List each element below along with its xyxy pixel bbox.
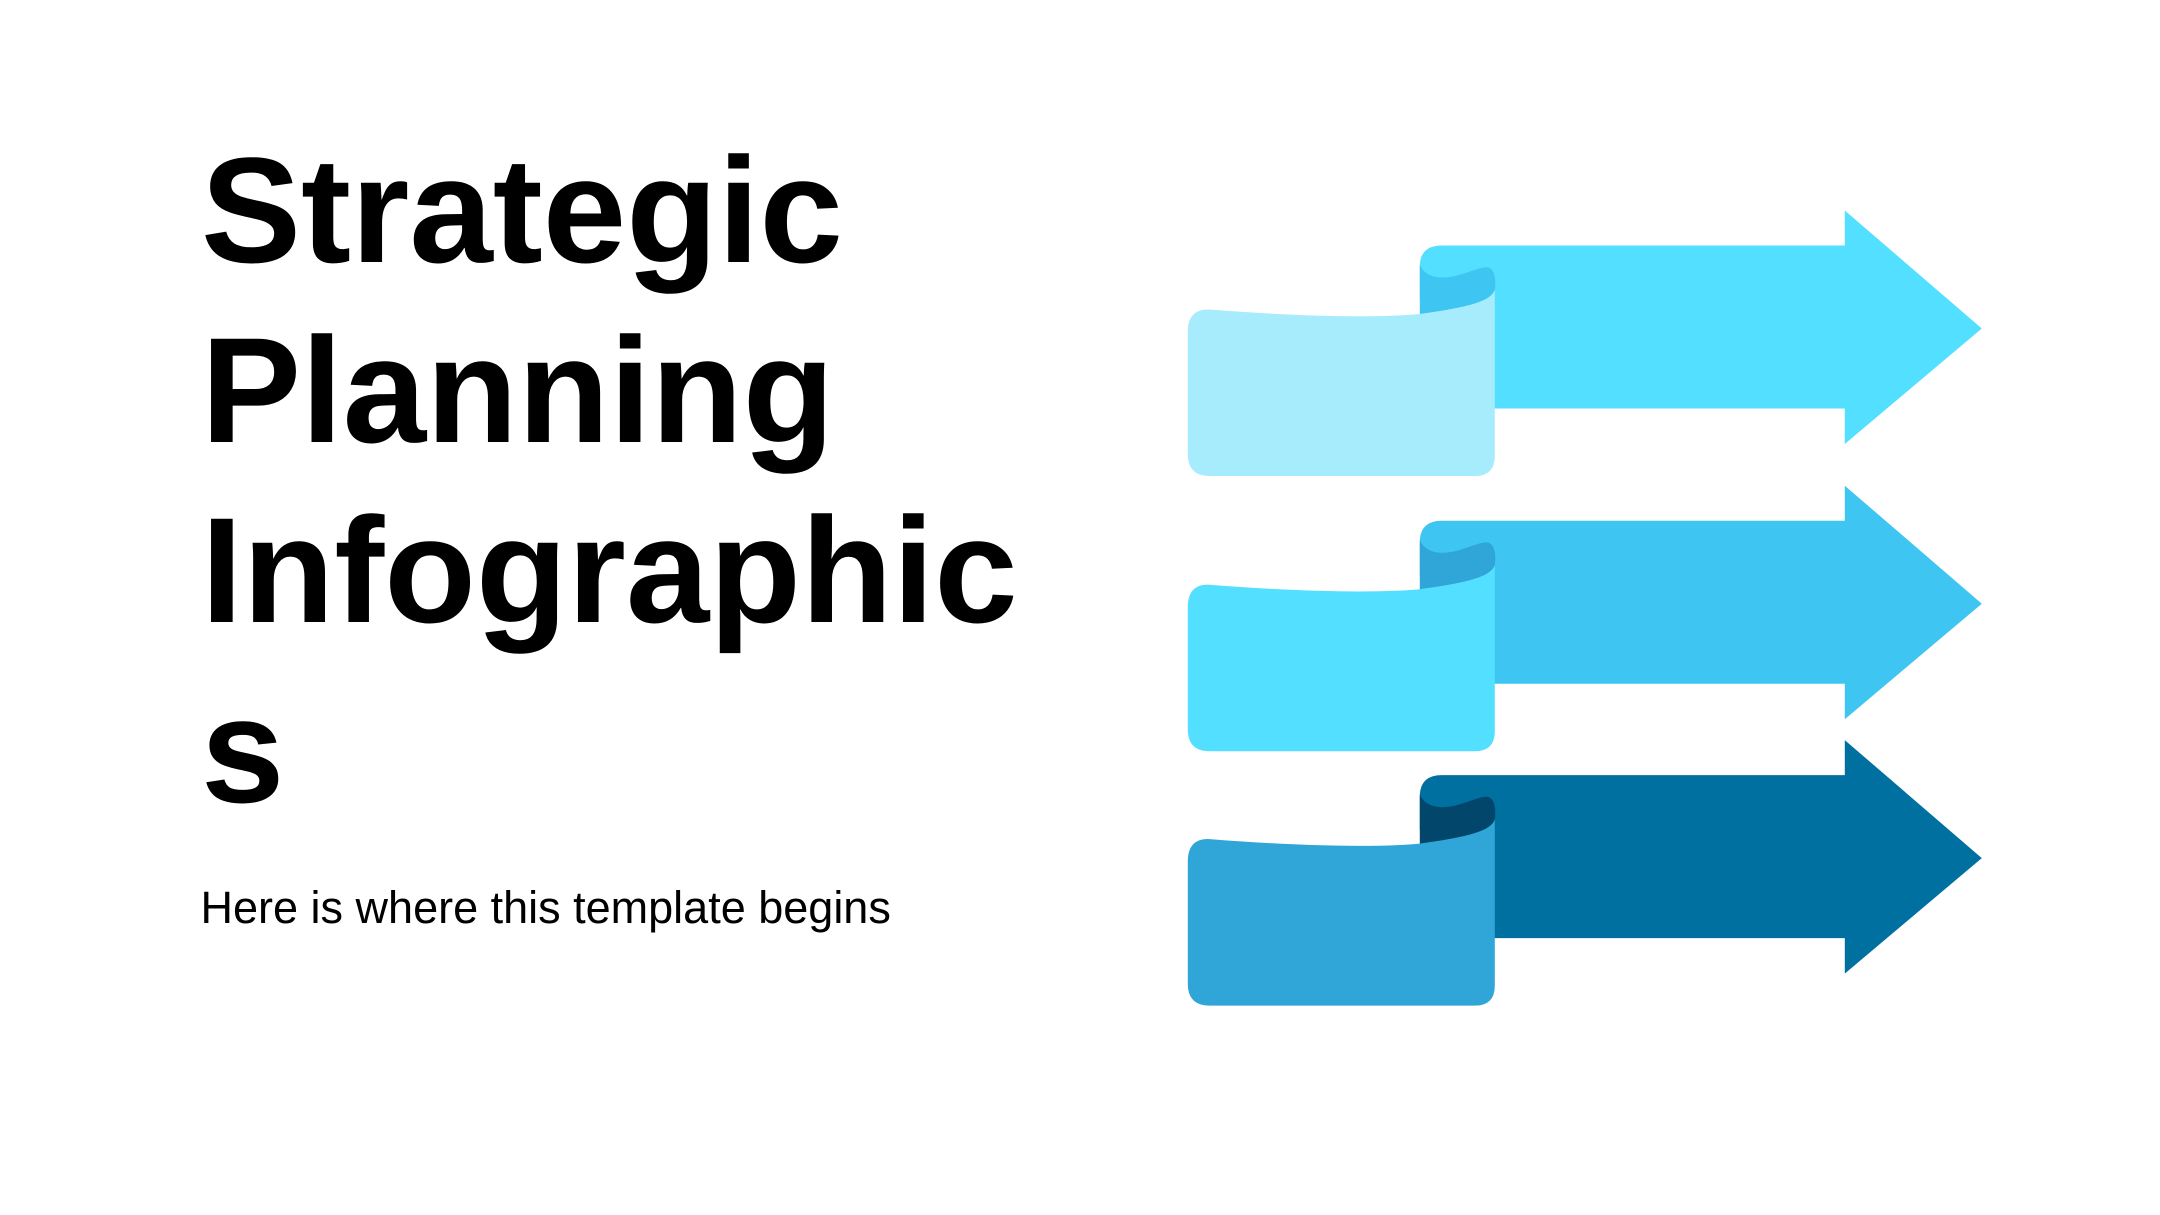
title: Infographic <box>201 486 1018 654</box>
subtitle: Here is where this template begins <box>200 882 891 933</box>
arrow with ribbon 3 <box>1188 740 1982 1006</box>
title <box>201 126 1018 834</box>
title: Strategic <box>201 126 843 294</box>
title: s <box>201 666 284 834</box>
title: Planning <box>201 306 834 474</box>
arrow with ribbon 1 <box>1188 210 1982 476</box>
arrow with ribbon 2 <box>1188 486 1982 751</box>
